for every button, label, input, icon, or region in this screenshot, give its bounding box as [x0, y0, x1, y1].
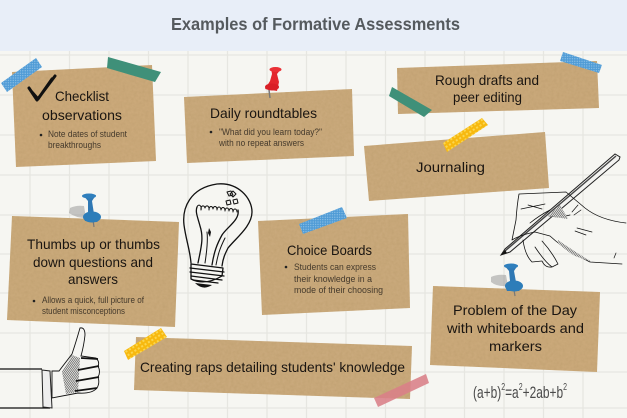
heading: Rough drafts and: [435, 72, 539, 88]
bullet text: student misconceptions: [42, 306, 125, 316]
tape: green: [107, 57, 161, 82]
heading: [42, 88, 122, 123]
heading: answers: [68, 271, 118, 287]
title: Examples of Formative Assessments: [171, 14, 460, 34]
heading: Daily roundtables: [210, 105, 317, 121]
heading: [435, 72, 539, 105]
panel: thumbs up or down: [7, 194, 179, 327]
math formula: =a: [505, 383, 519, 402]
math formula: (a+b): [473, 383, 513, 402]
heading: Checklist: [55, 88, 109, 104]
heading: down questions and: [33, 254, 153, 270]
icon: light bulb: [184, 184, 252, 288]
heading: markers: [489, 338, 542, 354]
tape: green: [389, 87, 432, 117]
panel: problem of the day: [430, 264, 600, 372]
panel: journaling: [364, 118, 549, 201]
icon: thumbs up hand: [0, 328, 100, 408]
bullet text: [40, 129, 127, 150]
heading: Problem of the Day: [453, 302, 577, 318]
tape: yellow: [443, 118, 488, 152]
math formula: 2: [501, 382, 505, 393]
tape: blue: [299, 207, 347, 234]
math formula: 2: [519, 382, 523, 393]
heading: peer editing: [453, 89, 522, 105]
bullet text: [210, 127, 322, 148]
bullet text: [285, 262, 383, 295]
bullet text: with no repeat answers: [218, 138, 304, 148]
tape: yellow: [124, 328, 167, 360]
bullet text: "What did you learn today?": [219, 127, 322, 137]
bullet text: mode of their choosing: [294, 285, 383, 295]
tape: blue: [1, 58, 42, 92]
panel: rough drafts: [389, 52, 602, 117]
panel: choice boards: [258, 207, 410, 315]
heading: [27, 236, 160, 287]
bullet text: Allows a quick, full picture of: [42, 295, 144, 305]
icon: blue push pin: [69, 194, 101, 227]
icon: check mark: [29, 76, 55, 100]
math formula: 2: [563, 382, 567, 393]
bullet text: Note dates of student: [48, 129, 127, 139]
header band: [0, 0, 627, 51]
tape: pink: [374, 374, 429, 407]
panel: creating raps: [124, 328, 429, 407]
heading: with whiteboards and: [446, 320, 584, 336]
panel: daily roundtables: [184, 67, 354, 163]
icon: blue push pin: [491, 264, 523, 296]
heading: [446, 302, 584, 354]
heading: Creating raps detailing students' knowledge: [140, 359, 405, 375]
icon: red push pin: [265, 67, 282, 98]
bullet text: [33, 295, 144, 316]
bullet text: breakthroughs: [48, 140, 101, 150]
icon: hand holding pencil: [501, 154, 626, 267]
heading: observations: [42, 107, 122, 123]
heading: Journaling: [416, 159, 485, 175]
heading: Choice Boards: [287, 242, 372, 258]
heading: Thumbs up or thumbs: [27, 236, 160, 252]
tape: blue: [560, 52, 602, 73]
bullet text: Students can express: [294, 262, 376, 272]
panel: checklist observations: [1, 57, 161, 167]
bullet text: their knowledge in a: [294, 274, 372, 284]
math formula: +2ab+b: [523, 383, 563, 402]
